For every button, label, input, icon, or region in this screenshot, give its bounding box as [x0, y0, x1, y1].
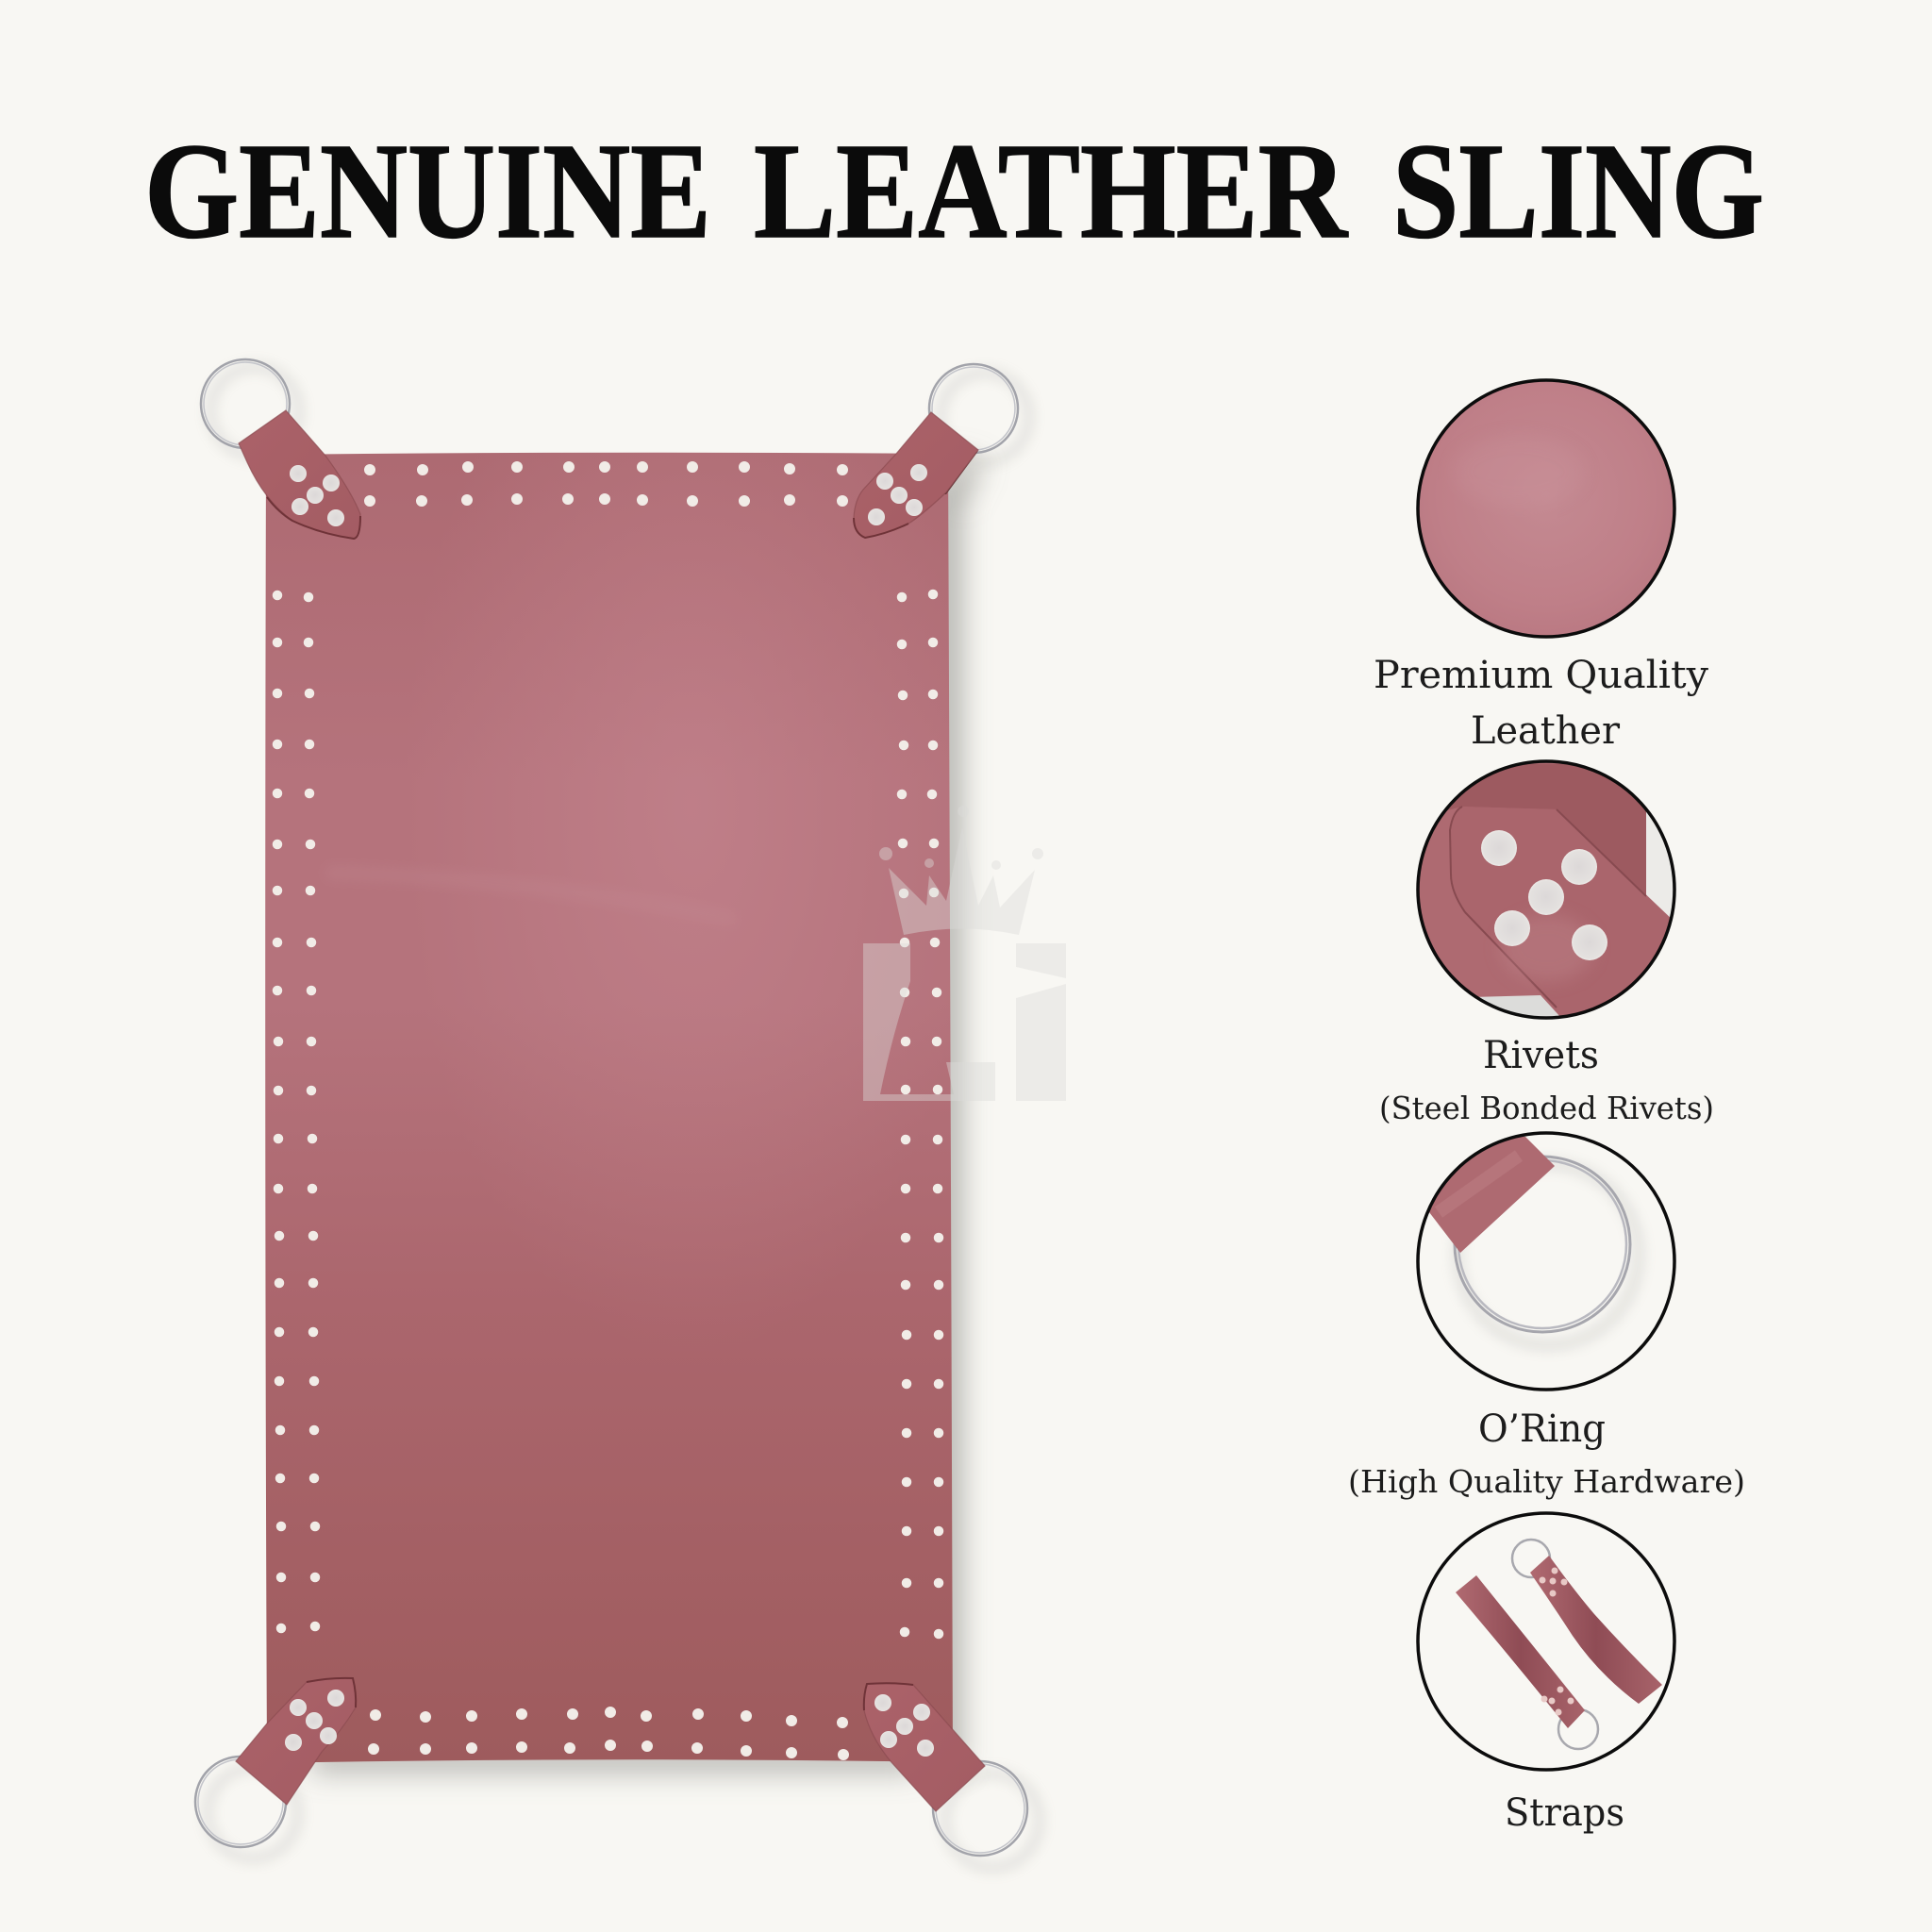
title: LEATHER: [754, 116, 1348, 267]
label: rivets: (Steel Bonded Rivets): [1379, 1090, 1714, 1126]
detail circle: premium leather: [1418, 380, 1674, 637]
leather sling product: [195, 359, 1066, 1868]
top and bottom rivets: [370, 467, 843, 1755]
label: rivets: Rivets: [1483, 1034, 1599, 1077]
sheet highlight: [265, 453, 953, 1763]
label: o-ring: (High Quality Hardware): [1348, 1463, 1745, 1500]
sheet crease: [325, 873, 736, 920]
bottom-right ring: [933, 1761, 1027, 1856]
top-left ring: [201, 359, 290, 448]
label: straps: Straps: [1505, 1791, 1624, 1835]
top-left tab: [239, 410, 360, 539]
detail circle: rivets: [1415, 755, 1689, 1028]
bottom-left tab: [236, 1678, 356, 1805]
title: GENUINE: [144, 116, 711, 267]
bottom-right tab: [864, 1683, 985, 1811]
label: rivets: [1379, 1034, 1714, 1126]
title: SLING: [1392, 116, 1764, 267]
detail circle: o-ring: [1396, 1123, 1674, 1390]
leather sheet: [265, 453, 953, 1763]
label: premium quality leather: Premium Quality: [1374, 654, 1708, 697]
top-right tab: [854, 412, 978, 538]
label: o-ring: [1348, 1407, 1745, 1500]
strap with ring, upper: [1512, 1540, 1662, 1704]
watermark: [863, 806, 1066, 1101]
bottom-left ring: [195, 1757, 286, 1847]
detail circle: straps: [1418, 1513, 1674, 1770]
strap with ring, lower: [1456, 1575, 1598, 1749]
side rivets: [277, 594, 939, 1634]
label: premium quality leather: [1374, 654, 1708, 753]
ring shadows: [208, 367, 1040, 1868]
label: premium quality leather: Leather: [1471, 709, 1621, 753]
top-right ring: [929, 364, 1018, 453]
label: o-ring: O’Ring: [1478, 1407, 1606, 1451]
drop shadow: [311, 453, 986, 1774]
title: [144, 116, 1764, 267]
